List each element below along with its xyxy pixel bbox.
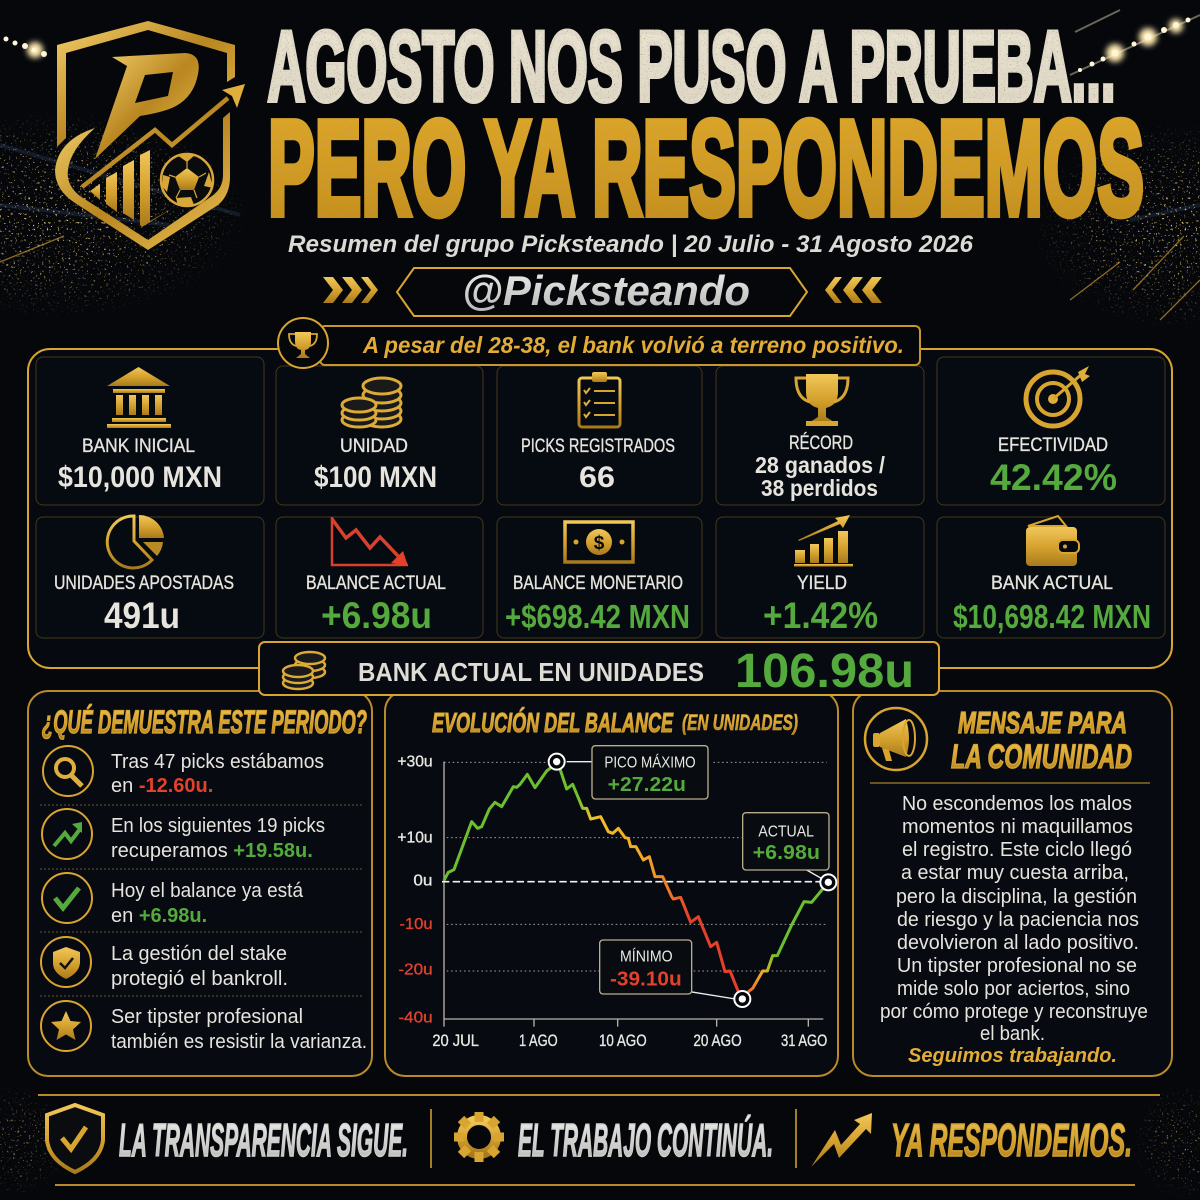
card: yield	[716, 515, 924, 638]
icon: trophy	[796, 374, 848, 426]
message text: por cómo protege y reconstruye	[880, 1001, 1148, 1023]
label: EFECTIVIDAD	[998, 435, 1108, 456]
item 2	[42, 809, 325, 862]
label: BANK ACTUAL EN UNIDADES	[358, 657, 704, 687]
card: bank actual	[937, 516, 1165, 638]
text: La gestión del stake	[111, 943, 287, 965]
y axis labels: -10u	[399, 916, 433, 933]
value: 42.42%	[990, 457, 1117, 498]
handle banner	[323, 267, 882, 316]
x axis labels	[432, 1031, 827, 1050]
y axis labels: -20u	[398, 961, 433, 978]
subtitle: Resumen del grupo Picksteando | 20 Julio - 31 Agosto 2026	[288, 231, 974, 258]
y axis labels: +10u	[397, 829, 433, 846]
label: UNIDAD	[340, 436, 408, 457]
label: BANK ACTUAL	[991, 573, 1113, 594]
footer band	[38, 1095, 1160, 1185]
left chevrons	[323, 277, 378, 303]
item 3	[42, 873, 304, 927]
footer band: EL TRABAJO CONTINÚA.	[518, 1114, 773, 1166]
label: BALANCE ACTUAL	[306, 573, 446, 594]
text with value: en +6.98u.	[111, 905, 207, 927]
icon: coins	[342, 378, 401, 427]
icon: shield check	[47, 1105, 103, 1172]
heading: EVOLUCIÓN DEL BALANCE	[432, 707, 674, 738]
footer band: LA TRANSPARENCIA SIGUE.	[119, 1114, 408, 1166]
x axis labels: 20 JUL	[432, 1031, 479, 1050]
text: Hoy el balance ya está	[111, 880, 304, 902]
callout: minimum: -39.10u	[610, 968, 682, 991]
label: BANK INICIAL	[82, 436, 195, 457]
letter P	[95, 53, 199, 159]
x axis labels: 1 AGO	[519, 1031, 558, 1050]
callout: peak: +27.22u	[608, 773, 686, 796]
card: bank inicial	[36, 357, 264, 505]
value: +6.98u	[321, 595, 432, 636]
rising arrow	[82, 98, 228, 187]
text: también es resistir la varianza.	[111, 1031, 367, 1053]
heading line 1: MENSAJE PARA	[958, 705, 1127, 740]
markers	[549, 754, 836, 1007]
value: +$698.42 MXN	[505, 598, 690, 635]
card: récord	[716, 366, 924, 505]
value: $10,698.42 MXN	[953, 598, 1151, 635]
x axis labels: 31 AGO	[781, 1031, 827, 1050]
icon: gear	[454, 1112, 504, 1162]
icon: falling chart	[332, 517, 408, 566]
closing line: Seguimos trabajando.	[908, 1045, 1117, 1067]
label: RÉCORD	[789, 433, 853, 454]
message text: de riesgo y la paciencia nos	[897, 909, 1139, 931]
banner: trophy and message	[278, 318, 920, 368]
card: unidad	[276, 366, 483, 505]
icon: green arrow	[42, 809, 92, 859]
icon: megaphone	[865, 708, 927, 770]
label: BALANCE MONETARIO	[513, 573, 683, 594]
icon: rising arrow	[811, 1113, 872, 1167]
item 4	[41, 937, 288, 990]
icon: target	[1026, 366, 1090, 426]
callout: minimum: MÍNIMO	[620, 949, 673, 966]
y axis labels: +30u	[397, 754, 433, 771]
message text	[880, 793, 1148, 1045]
callout: current: +6.98u	[753, 841, 820, 864]
icon: rising bars	[794, 515, 853, 566]
value: 66	[579, 461, 615, 494]
icon: wallet	[1026, 516, 1079, 566]
x axis labels: 20 AGO	[693, 1031, 742, 1050]
shield frame	[55, 21, 235, 250]
callout: minimum	[600, 940, 692, 994]
y axis labels	[397, 754, 433, 1027]
heading: ¿QUÉ DEMUESTRA ESTE PERIODO?	[42, 704, 367, 740]
text with value: en -12.60u.	[111, 775, 213, 797]
text: Tras 47 picks estábamos	[111, 751, 324, 773]
right chevrons	[825, 277, 882, 303]
label: PICKS REGISTRADOS	[521, 436, 675, 457]
handle text: @Picksteando	[462, 267, 750, 314]
item 1	[43, 746, 324, 797]
message text: No escondemos los malos	[902, 793, 1132, 815]
banner: bank actual en unidades	[259, 642, 939, 698]
icon: check	[42, 873, 92, 923]
callout: current	[743, 813, 829, 870]
value: 106.98u	[735, 645, 914, 698]
y axis labels: 0u	[413, 873, 432, 890]
icon: pie chart	[107, 515, 164, 568]
x axis labels: 10 AGO	[599, 1031, 647, 1050]
icon: magnifier	[43, 746, 93, 796]
panel: mensaje para la comunidad	[853, 691, 1172, 1076]
icon: coin stacks	[283, 652, 325, 689]
value line 2: 38 perdidos	[761, 475, 878, 501]
callout: peak: PICO MÁXIMO	[604, 754, 696, 771]
y axis labels: -40u	[398, 1010, 433, 1027]
card: efectividad	[937, 357, 1165, 505]
panel: que demuestra este periodo	[28, 691, 372, 1076]
logo: gold shield	[55, 21, 245, 250]
line chart	[397, 746, 836, 1050]
message text: momentos ni maquillamos	[902, 816, 1133, 838]
message text: pero la disciplina, la gestión	[896, 886, 1137, 908]
bars	[90, 150, 173, 227]
callout: current: ACTUAL	[758, 824, 814, 841]
icon: star	[41, 1001, 91, 1051]
value line 1: 28 ganados /	[755, 452, 886, 478]
icon: bank	[107, 367, 171, 428]
card: unidades apostadas	[36, 515, 264, 638]
card: picks registrados	[497, 366, 702, 505]
message text: mide solo por aciertos, sino	[897, 978, 1130, 1000]
stats frame	[28, 349, 1172, 668]
icon: banknote: $	[594, 533, 605, 554]
label: UNIDADES APOSTADAS	[54, 573, 234, 594]
value: $100 MXN	[314, 461, 437, 494]
message text: devolvieron al lado positivo.	[897, 932, 1139, 954]
value: +1.42%	[763, 595, 878, 636]
value: $10,000 MXN	[58, 461, 222, 494]
icon: small trophy	[278, 318, 328, 368]
icon: clipboard	[579, 372, 620, 427]
text: En los siguientes 19 picks	[111, 815, 325, 837]
icon: shield	[41, 937, 91, 987]
banner text: A pesar del 28-38, el bank volvió a terreno positivo.	[362, 332, 904, 358]
soccer ball	[161, 154, 213, 206]
text with value: recuperamos +19.58u.	[111, 840, 313, 862]
message text: Un tipster profesional no se	[897, 955, 1137, 977]
message text: el bank.	[980, 1023, 1045, 1045]
message text: a estar muy cuesta arriba,	[901, 862, 1129, 884]
text: Ser tipster profesional	[111, 1006, 303, 1028]
item 5	[41, 1001, 367, 1053]
callout: peak	[592, 746, 708, 799]
heading suffix: (EN UNIDADES)	[682, 710, 798, 735]
text: protegió el bankroll.	[111, 968, 288, 990]
label: YIELD	[797, 573, 847, 594]
card: balance monetario	[497, 517, 702, 638]
message text: el registro. Este ciclo llegó	[902, 839, 1132, 861]
value: 491u	[104, 595, 180, 636]
balance curve	[444, 763, 828, 999]
panel: evolucion del balance	[385, 691, 838, 1076]
icon: banknote	[565, 522, 633, 562]
card: balance actual	[276, 517, 483, 638]
